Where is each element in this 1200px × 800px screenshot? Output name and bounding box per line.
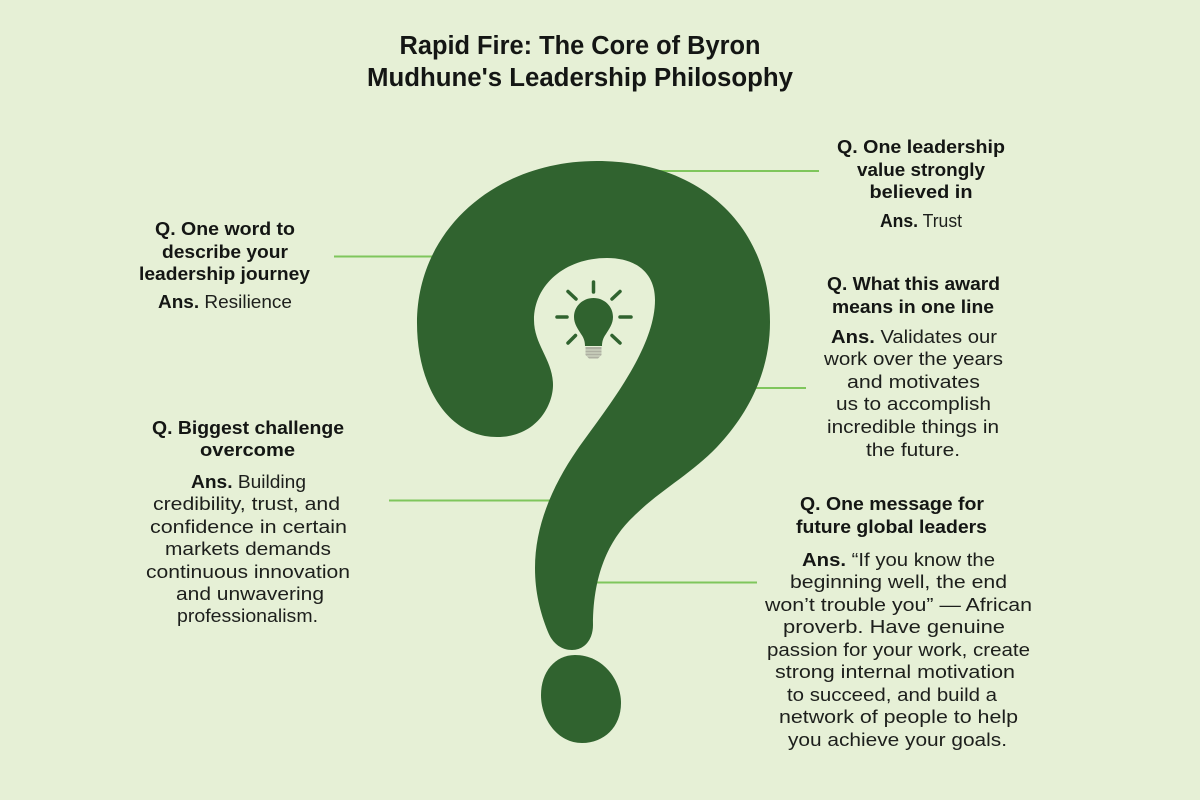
text block: what this award means: Q. What this award: [827, 273, 1000, 294]
text block: biggest challenge: Ans. Building: [191, 471, 306, 492]
connector lines: [334, 171, 819, 582]
bulb rays: [557, 282, 631, 343]
text block: biggest challenge: and unwavering: [176, 583, 324, 604]
question mark hook and stem: [417, 161, 770, 650]
text block: biggest challenge: continuous innovation: [146, 561, 350, 582]
title: Mudhune's Leadership Philosophy: [367, 64, 794, 92]
text block: biggest challenge: confidence in certain: [150, 516, 347, 537]
text block: what this award means: work over the years: [823, 348, 1003, 369]
bulb glass: [574, 298, 613, 346]
text block: message for future leaders: future global leaders: [796, 516, 987, 537]
text block: one leadership value: Q. One leadership: [837, 136, 1005, 157]
text block: biggest challenge: Q. Biggest challenge: [152, 417, 344, 438]
text block: one leadership value: Ans. Trust: [880, 210, 962, 231]
text block: message for future leaders: Q. One message for: [800, 493, 984, 514]
text block: one leadership value: believed in: [870, 181, 972, 202]
text block: what this award means: and motivates: [847, 371, 980, 392]
icon: light bulb: [557, 282, 631, 358]
text block: message for future leaders: Ans. “If you know the: [802, 549, 995, 570]
text block: message for future leaders: strong internal motivation: [775, 661, 1015, 682]
text block: what this award means: [823, 273, 1003, 460]
text block: what this award means: the future.: [866, 439, 960, 460]
text block: biggest challenge: [146, 417, 350, 626]
text block: biggest challenge: credibility, trust, and: [153, 493, 340, 514]
text block: one word: Ans. Resilience: [158, 291, 292, 312]
text block: message for future leaders: won’t trouble you” — African: [764, 594, 1032, 615]
text block: message for future leaders: to succeed, and build a: [787, 684, 998, 705]
text block: message for future leaders: beginning well, the end: [790, 571, 1007, 592]
question mark dot: [541, 655, 621, 743]
text block: message for future leaders: network of people to help: [779, 706, 1018, 727]
text block: one leadership value: value strongly: [857, 159, 986, 180]
text block: one word: Q. One word to: [155, 218, 295, 239]
text block: message for future leaders: proverb. Have genuine: [783, 616, 1005, 637]
question mark: [417, 161, 770, 743]
text block: what this award means: means in one line: [832, 296, 994, 317]
text block: one word: leadership journey: [139, 263, 311, 284]
text block: what this award means: incredible things in: [827, 416, 999, 437]
text block: one leadership value: [837, 136, 1005, 231]
text block: message for future leaders: passion for your work, create: [767, 639, 1030, 660]
text block: message for future leaders: you achieve your goals.: [788, 729, 1007, 750]
text block: biggest challenge: professionalism.: [177, 605, 318, 626]
title: [367, 32, 794, 92]
title: Rapid Fire: The Core of Byron: [400, 32, 760, 60]
bulb base: [586, 347, 602, 358]
text block: one word: [139, 218, 311, 312]
text block: message for future leaders: [764, 493, 1032, 750]
text block: one word: describe your: [162, 241, 288, 262]
text block: biggest challenge: overcome: [200, 439, 295, 460]
text block: what this award means: us to accomplish: [836, 393, 991, 414]
text block: biggest challenge: markets demands: [165, 538, 331, 559]
text block: what this award means: Ans. Validates our: [831, 326, 997, 347]
